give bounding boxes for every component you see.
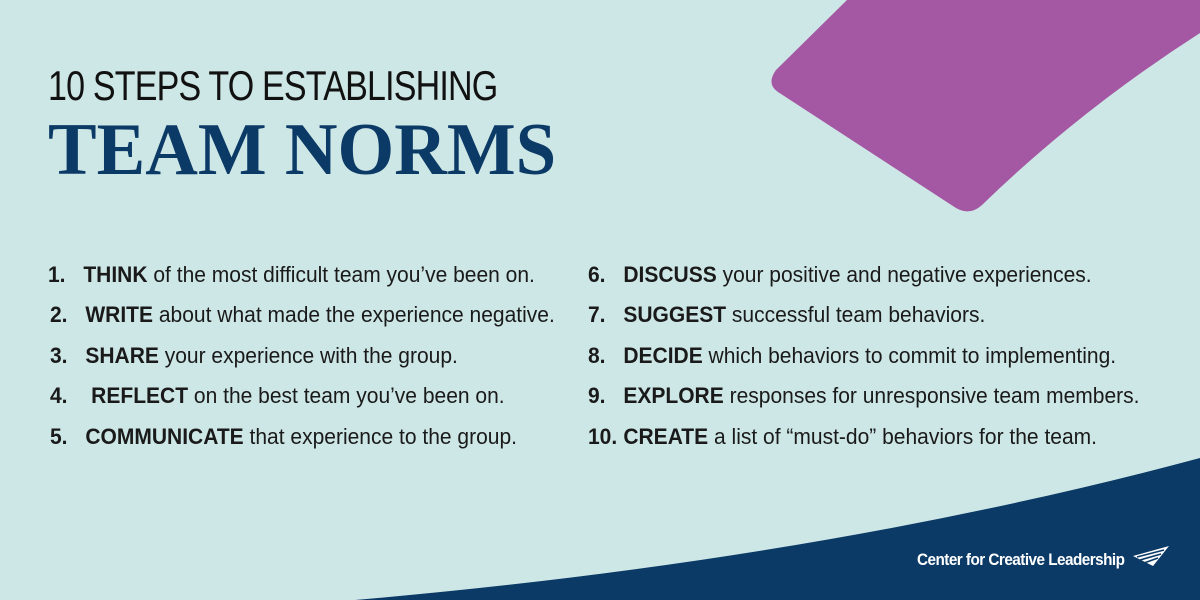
text: SUGGEST successful team behaviors. [623,302,985,327]
logo [917,546,1169,569]
purple shape [771,0,1200,211]
text: 8. [588,343,606,368]
text: 3. [50,343,68,368]
text: REFLECT on the best team you’ve been on. [91,383,505,408]
text: 2. [50,302,68,327]
text: 5. [50,424,68,449]
text: 9. [588,383,606,408]
left list [48,262,555,449]
navy wave [355,458,1200,600]
icon: logo wings [1133,546,1169,566]
subtitle: 10 STEPS TO ESTABLISHING [48,62,497,109]
text: CREATE a list of “must-do” behaviors for the team. [623,424,1097,449]
text: EXPLORE responses for unresponsive team members. [623,383,1139,408]
text: 10. [588,424,617,449]
text: 6. [588,262,606,287]
text: 7. [588,302,606,327]
right list [588,262,1139,449]
logo: Center for Creative Leadership [917,550,1124,569]
text: DECIDE which behaviors to commit to implementing. [623,343,1116,368]
title: TEAM NORMS [48,109,556,191]
text: WRITE about what made the experience negative. [85,302,555,327]
text: THINK of the most difficult team you’ve been on. [83,262,535,287]
text: SHARE your experience with the group. [85,343,458,368]
text: 1. [48,262,66,287]
text: 4. [50,383,68,408]
text: COMMUNICATE that experience to the group. [85,424,517,449]
text: DISCUSS your positive and negative experiences. [623,262,1092,287]
